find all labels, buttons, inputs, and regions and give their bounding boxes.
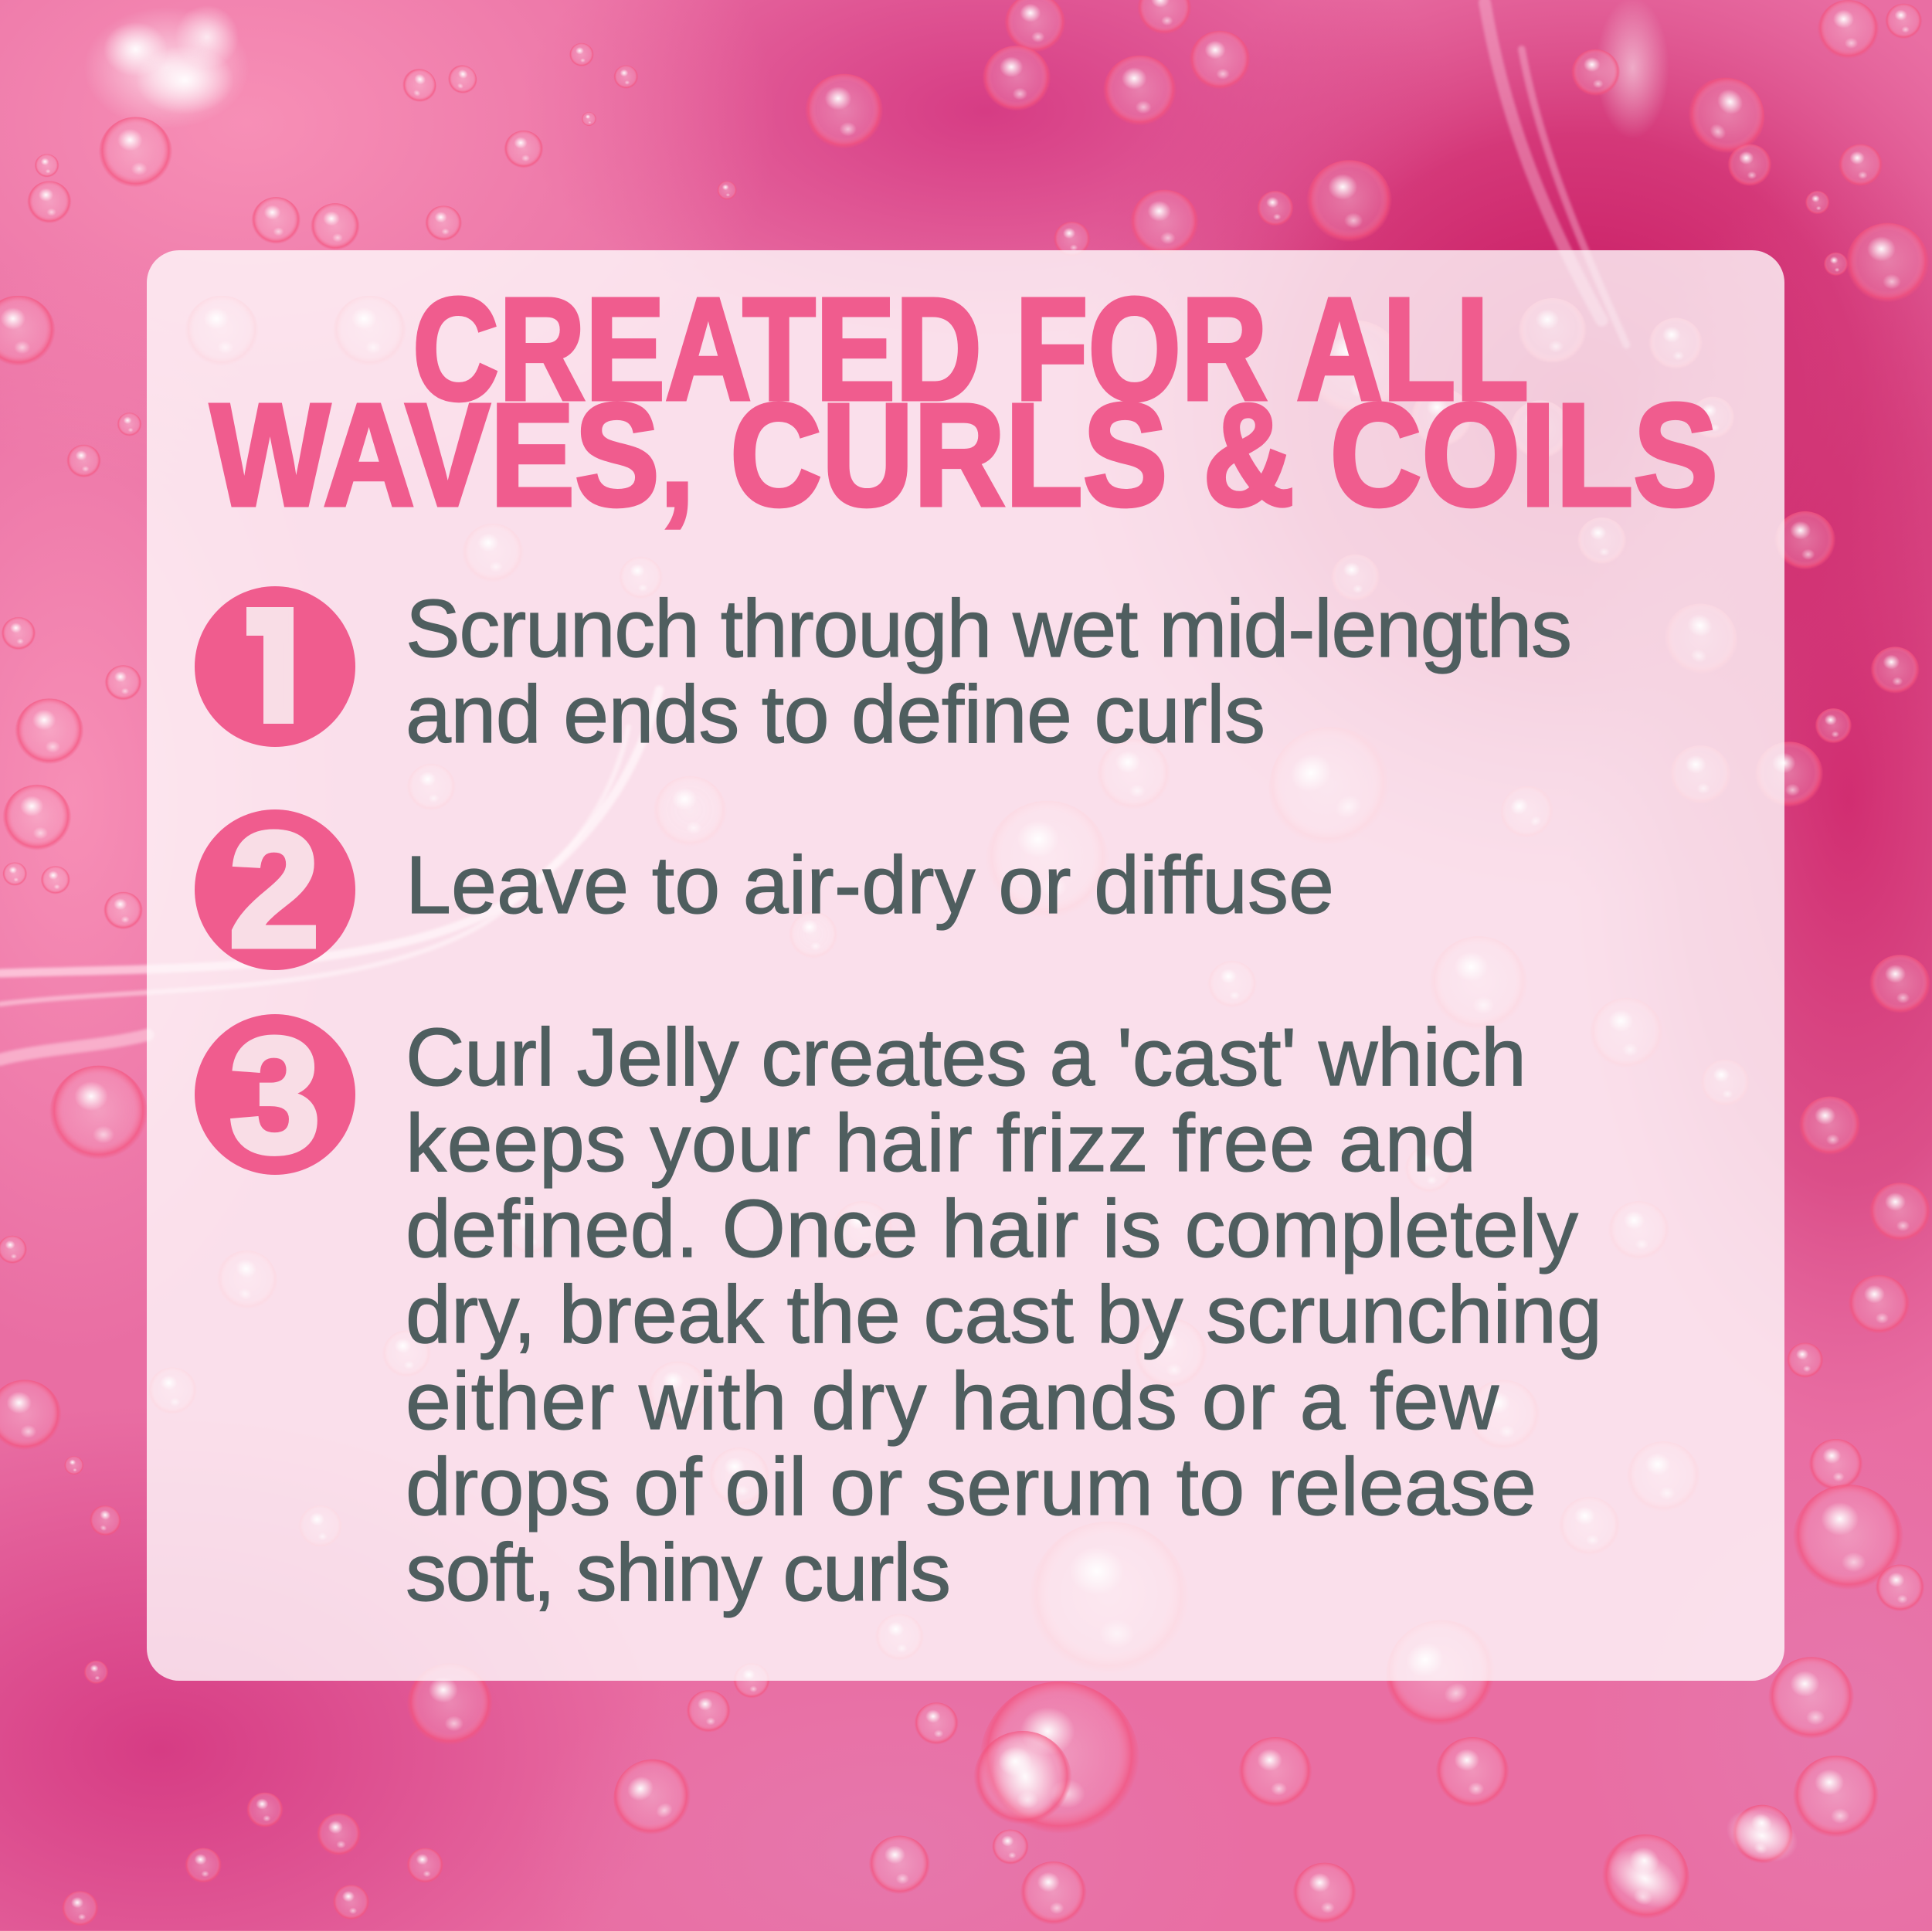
icon: number 3: 3: [229, 1003, 321, 1186]
step 3 text: Curl Jelly creates a 'cast' which: [406, 1012, 1526, 1103]
title: WAVES, CURLS & COILS: [210, 374, 1718, 537]
panel: translucent card: [147, 250, 1784, 1681]
step 3 text: dry, break the cast by scrunching: [406, 1269, 1602, 1360]
step 1: [195, 586, 1570, 747]
highlights: bright bubble glints along the bottom: [983, 1726, 1805, 1920]
step 3 text: either with dry hands or a few: [406, 1356, 1499, 1447]
step 2: [195, 798, 1334, 981]
step 3 text: soft, shiny curls: [406, 1527, 951, 1618]
icon: number 2: [195, 798, 355, 981]
splash: white foam top-left: [83, 0, 1669, 139]
step 1 text: and ends to define curls: [406, 669, 1265, 760]
icon: number 1: [195, 586, 355, 747]
icon: number 3: [195, 1003, 355, 1186]
step 3 text: keeps your hair frizz free and: [406, 1098, 1476, 1189]
step 3: [195, 1003, 1602, 1618]
title: CREATED FOR ALL: [413, 268, 1529, 431]
icon: number 2: 2: [229, 798, 320, 981]
step 3 text: drops of oil or serum to release: [406, 1441, 1536, 1532]
step 1 text: Scrunch through wet mid-lengths: [406, 583, 1572, 674]
step 3 text: defined. Once hair is completely: [406, 1183, 1578, 1274]
icon: number 1: 1: [225, 575, 316, 758]
title: [210, 268, 1718, 537]
step 1 text: [406, 583, 1572, 760]
streak: liquid swirl: [0, 2, 1626, 1060]
step 2 text: Leave to air-dry or diffuse: [406, 840, 1334, 931]
step 3 text: [406, 1012, 1602, 1618]
